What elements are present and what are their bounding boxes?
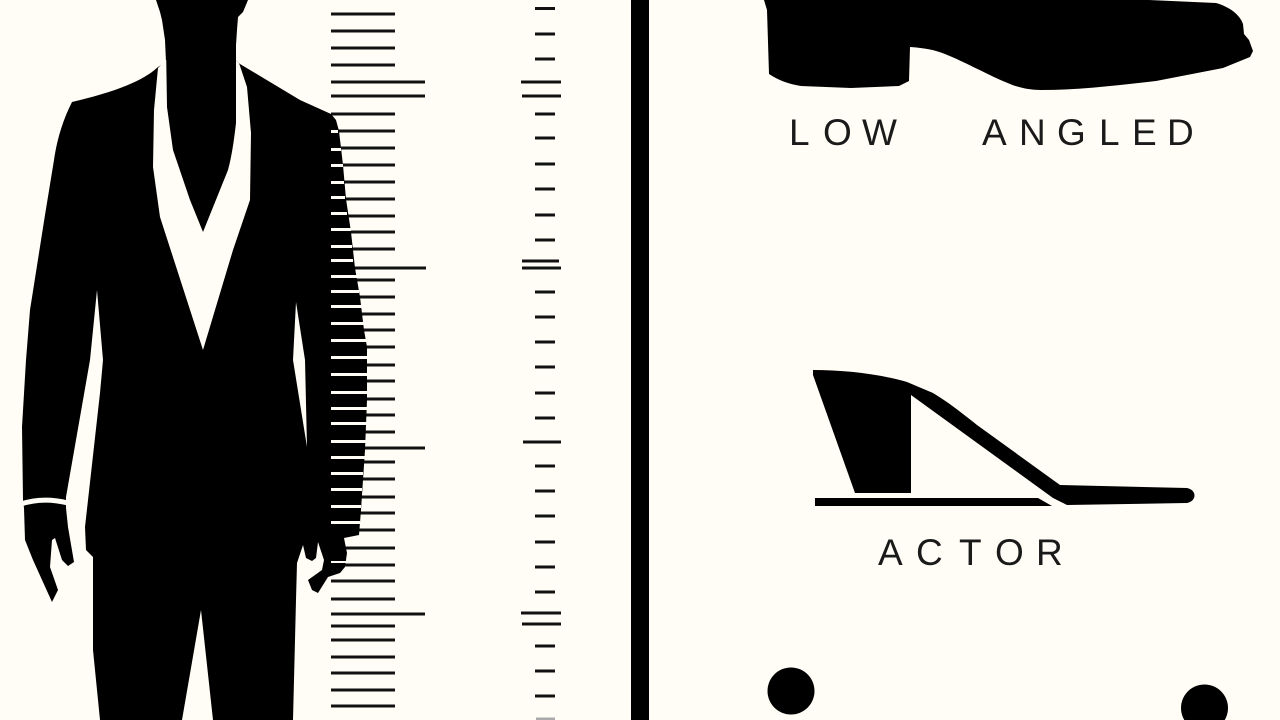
center divider bar: [631, 0, 649, 720]
label: low angled: LOW ANGLED: [789, 112, 1194, 153]
icon: raised heel shoe: [813, 370, 1194, 505]
ruler: primary scale ticks: [331, 14, 426, 706]
ruler: secondary scale ticks: [521, 8, 561, 719]
right arm inner gap: [293, 302, 307, 447]
arm measurement stripes: [331, 130, 367, 563]
panel: shoe comparison: [764, 0, 1253, 720]
icon: heel sole line: [815, 498, 1052, 506]
marker: left dot: [768, 668, 814, 714]
label: actor: ACTOR: [878, 532, 1063, 573]
left shirt cuff: [21, 500, 68, 504]
marker: right dot: [1181, 684, 1228, 720]
neck and tie shadow: [166, 45, 236, 232]
panel: actor height measurement: [21, 0, 561, 720]
figure: man in suit silhouette: [21, 0, 367, 720]
suit body silhouette: [22, 0, 367, 720]
icon: low heel shoe: [764, 0, 1253, 90]
white shirt and lapel: [153, 60, 251, 350]
